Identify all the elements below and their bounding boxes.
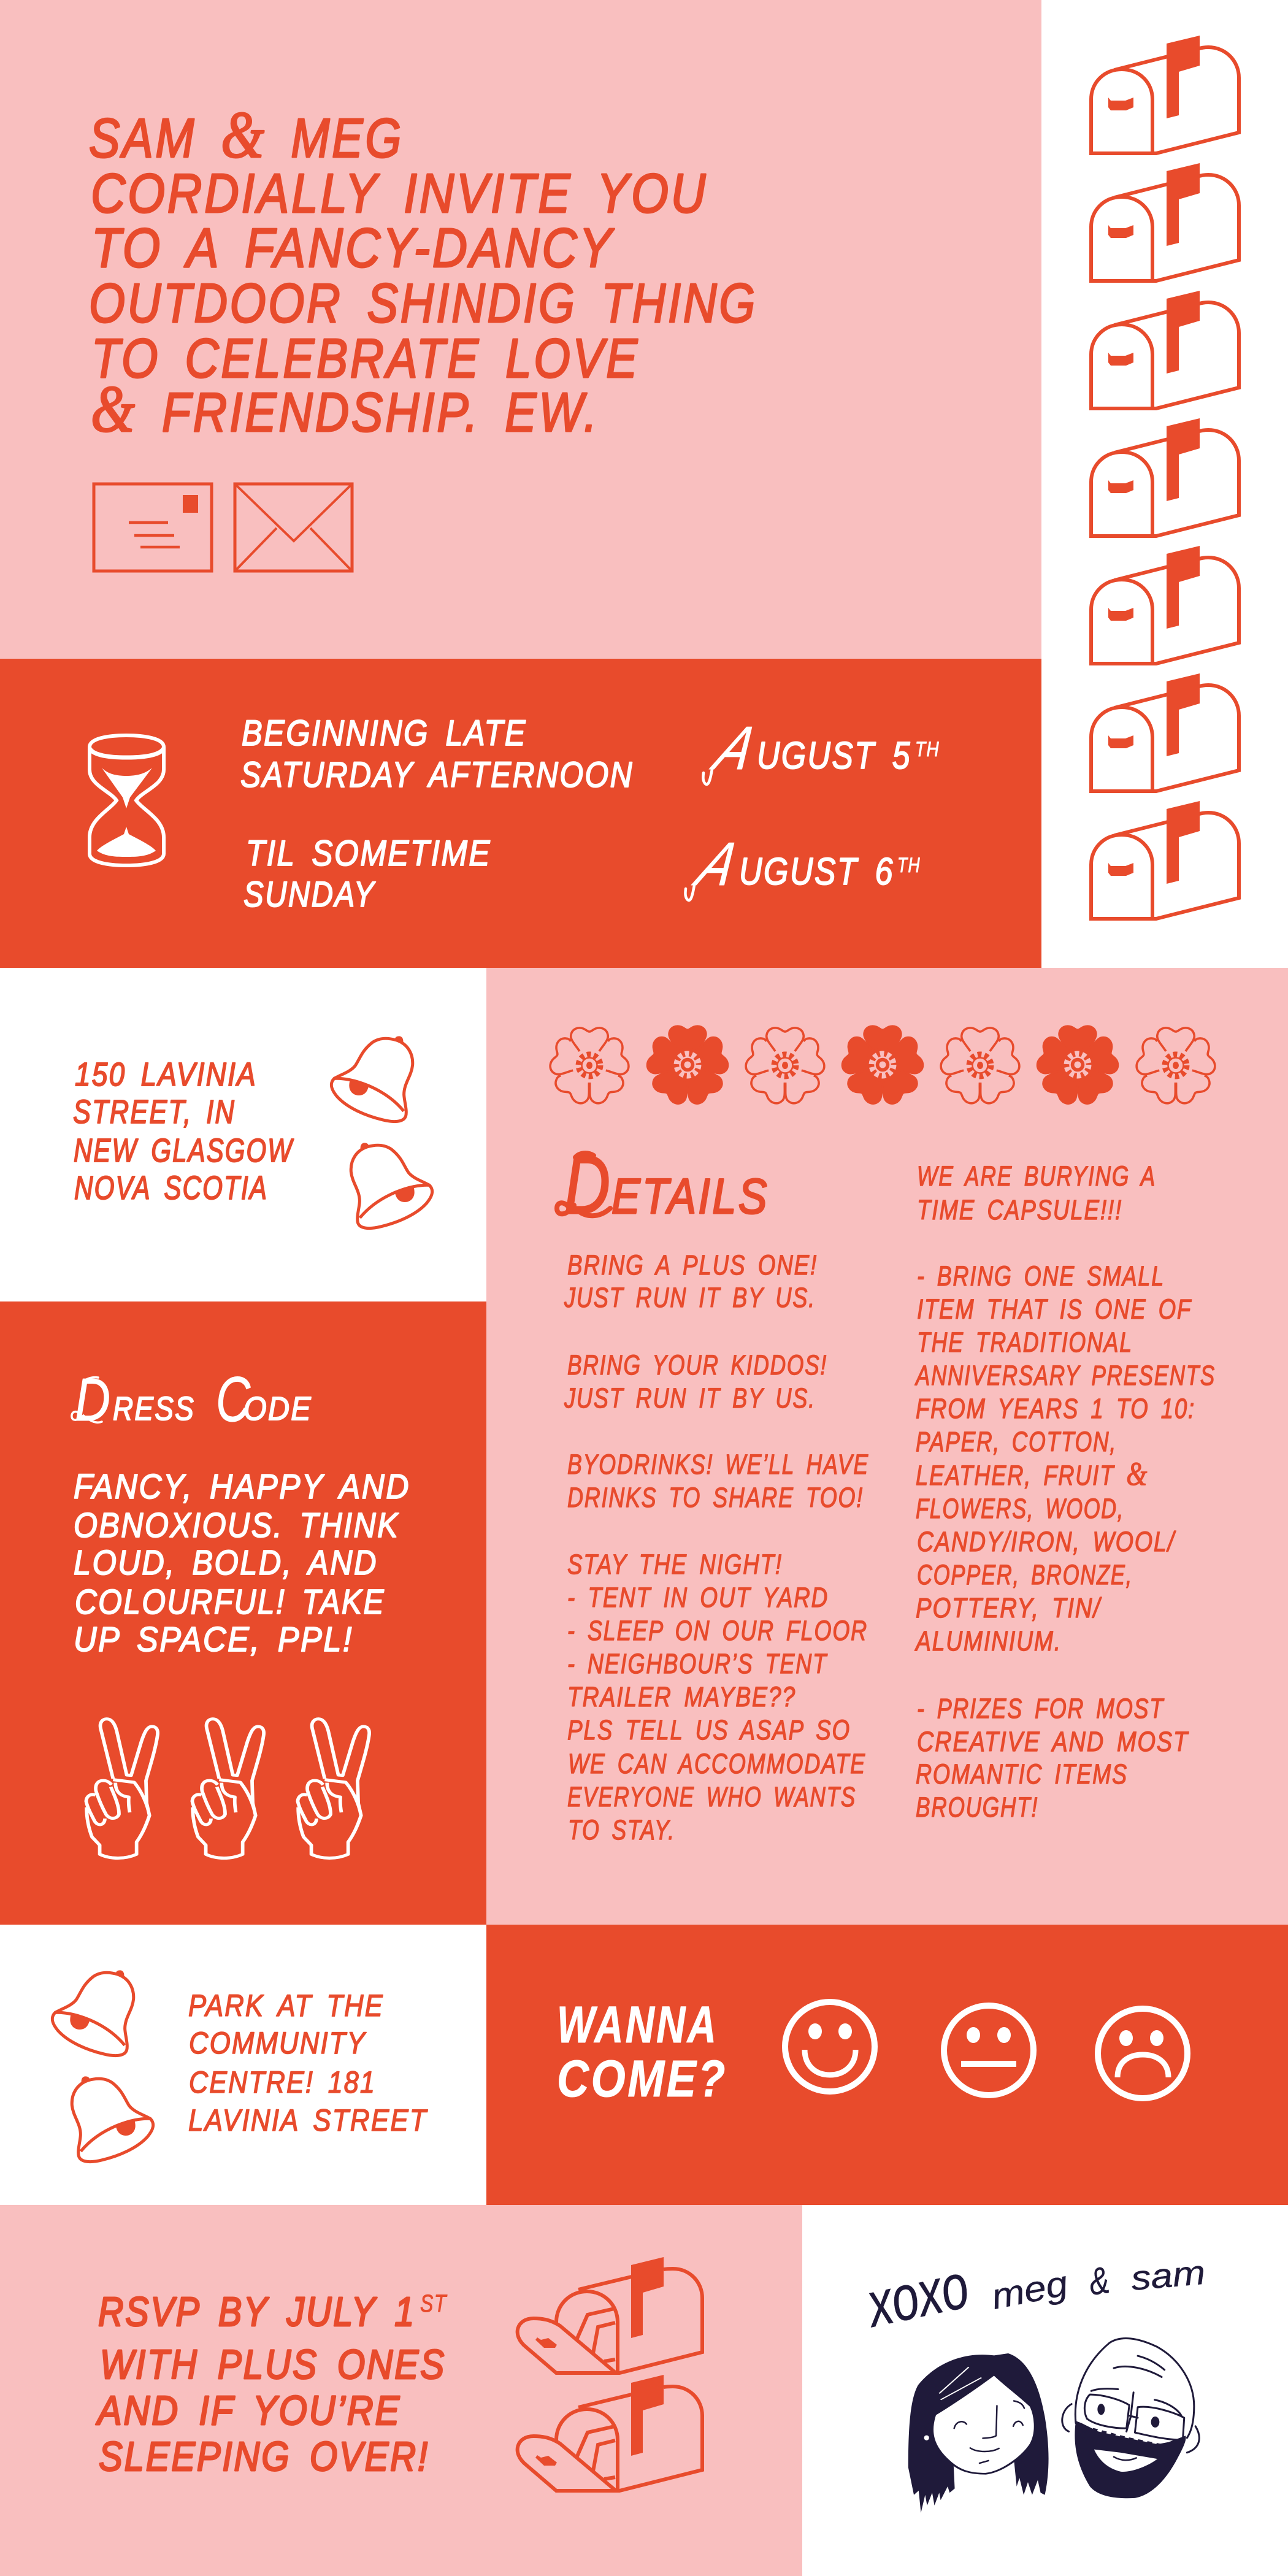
text: address: 150 LAVINIA <box>75 1056 257 1093</box>
text: details left column: - SLEEP ON OUR FLOOR <box>567 1615 868 1646</box>
title: invitation headline: TO A FANCY-DANCY <box>91 218 615 279</box>
icon: mailbox 1 <box>1089 36 1239 153</box>
text: details right column: CREATIVE AND MOST <box>917 1726 1189 1757</box>
text: details right column: ITEM THAT IS ONE OF <box>917 1294 1192 1325</box>
icon: open mailbox upper <box>518 2257 702 2373</box>
panel: intro invitation <box>0 0 1041 659</box>
text: details left column: WE CAN ACCOMMODATE <box>568 1748 866 1779</box>
text: dress code body <box>74 1467 410 1659</box>
icon: bell lower <box>351 1143 432 1229</box>
text: details right column: FROM YEARS 1 TO 10: <box>916 1393 1195 1424</box>
text: RSVP <box>95 2289 447 2480</box>
text: details left column <box>564 1249 869 1846</box>
text: details right column: THE TRADITIONAL <box>917 1327 1133 1358</box>
text: details right column: ALUMINIUM. <box>914 1625 1062 1657</box>
heading: dress code: RESS <box>113 1390 195 1427</box>
text: details left column: EVERYONE WHO WANTS <box>567 1781 856 1812</box>
text: details right column: WE ARE BURYING A <box>917 1160 1156 1192</box>
text: signature: sam <box>1130 2253 1207 2298</box>
panel: RSVP <box>0 2205 802 2576</box>
text: RSVP: AND IF YOU’RE <box>95 2388 401 2434</box>
text: details left column: BRING A PLUS ONE! <box>567 1249 818 1281</box>
text: parking <box>188 1988 428 2137</box>
panel: address <box>0 968 486 1301</box>
text: address: NEW GLASGOW <box>74 1132 294 1169</box>
text: details left column: TO STAY. <box>568 1814 675 1846</box>
heading: details: ETAILS <box>611 1169 769 1224</box>
icon: bell lower <box>72 2076 153 2162</box>
date: August 6th: UGUST 6 <box>739 851 894 893</box>
heading: wanna come <box>557 1996 727 2107</box>
text: details right column: CANDY/IRON, WOOL/ <box>917 1526 1176 1557</box>
icon: bell upper <box>52 1970 134 2056</box>
text: RSVP: SLEEPING OVER! <box>99 2434 429 2480</box>
text: details left column: JUST RUN IT BY US. <box>564 1382 816 1414</box>
heading: details: D <box>564 1138 613 1231</box>
heading: dress code <box>72 1364 312 1435</box>
text: address <box>73 1056 294 1206</box>
panel: schedule <box>0 659 1041 968</box>
heading: dress code: ODE <box>243 1390 312 1427</box>
text: details right column: FLOWERS, WOOD, <box>916 1493 1124 1524</box>
text: details right column: TIME CAPSULE!!! <box>917 1194 1122 1225</box>
title: invitation headline: OUTDOOR SHINDIG THING <box>89 273 757 334</box>
text: end time: SUNDAY <box>243 875 376 914</box>
date: August 6th <box>685 830 921 900</box>
icon: peace hand 2 <box>192 1719 264 1858</box>
title: invitation headline <box>89 99 757 446</box>
icon: mailbox 2 <box>1089 163 1239 281</box>
text: details right column: POTTERY, TIN/ <box>916 1592 1102 1623</box>
heading: dress code: D <box>75 1366 113 1433</box>
icon: bell upper <box>331 1036 413 1122</box>
text: details left column: BRING YOUR KIDDOS! <box>567 1349 827 1381</box>
panel: mailbox column <box>1041 0 1288 968</box>
text: address: STREET, IN <box>73 1094 236 1130</box>
portrait: meg <box>908 2353 1049 2513</box>
icon: mailbox 3 <box>1089 291 1239 408</box>
text: details left column: DRINKS TO SHARE TOO! <box>567 1482 864 1513</box>
panel: dress code <box>0 1301 486 1925</box>
date: August 5th: A <box>703 715 769 783</box>
text: details right column: - BRING ONE SMALL <box>917 1260 1165 1292</box>
text: parking: LAVINIA STREET <box>188 2103 428 2137</box>
text: details left column: TRAILER MAYBE?? <box>567 1681 796 1712</box>
text: start time: BEGINNING LATE <box>242 713 527 753</box>
text: end time <box>243 834 491 914</box>
text: signature <box>859 2250 1207 2341</box>
text: parking: PARK AT THE <box>188 1988 384 2023</box>
text: details left column: STAY THE NIGHT! <box>567 1549 783 1580</box>
text: details left column: PLS TELL US ASAP SO <box>567 1714 851 1746</box>
text: details right column: ROMANTIC ITEMS <box>916 1758 1128 1790</box>
text: end time: TIL SOMETIME <box>246 834 491 873</box>
text: details left column: - NEIGHBOUR’S TENT <box>567 1648 828 1679</box>
panel: details <box>486 968 1288 1925</box>
icon: peace hand 1 <box>86 1719 158 1858</box>
text: RSVP: RSVP BY JULY 1 <box>98 2289 416 2335</box>
text: details left column: JUST RUN IT BY US. <box>564 1282 816 1313</box>
icon: open mailbox lower <box>518 2375 702 2491</box>
text: address: NOVA SCOTIA <box>74 1170 268 1206</box>
text: details right column: LEATHER, FRUIT & <box>916 1455 1148 1492</box>
text: dress code body: UP SPACE, PPL! <box>74 1620 353 1659</box>
text: dress code body: LOUD, BOLD, AND <box>74 1543 378 1582</box>
icon: mailbox 6 <box>1089 673 1239 791</box>
flower row <box>548 1026 1217 1107</box>
heading: details <box>557 1138 769 1231</box>
date: August 5th <box>703 715 940 784</box>
text: signature: meg <box>988 2263 1071 2317</box>
date: August 5th: UGUST 5 <box>757 735 911 777</box>
icon: sad face <box>1098 2009 1187 2098</box>
icon: postcard <box>94 484 212 571</box>
title: invitation headline: CORDIALLY INVITE YOU <box>91 163 708 224</box>
date: August 5th: TH <box>915 738 940 761</box>
text: dress code body: FANCY, HAPPY AND <box>74 1467 410 1506</box>
icon: happy face <box>785 2002 875 2091</box>
text: details left column: - TENT IN OUT YARD <box>567 1582 829 1613</box>
text: RSVP: ST <box>420 2290 447 2317</box>
text: details left column: BYODRINKS! WE’LL HAVE <box>567 1449 869 1480</box>
heading: dress code: C <box>216 1364 253 1435</box>
text: details right column: COPPER, BRONZE, <box>917 1559 1133 1590</box>
text: start time <box>240 713 634 795</box>
icon: envelope <box>235 484 352 571</box>
panel: signature and portraits <box>802 2205 1288 2576</box>
panel: wanna come <box>486 1925 1288 2205</box>
text: parking: COMMUNITY <box>189 2026 367 2060</box>
icon: mailbox 4 <box>1089 418 1239 536</box>
text: RSVP: WITH PLUS ONES <box>100 2342 446 2388</box>
text: signature: xoxo <box>859 2250 975 2341</box>
icon: mailbox 7 <box>1089 801 1239 919</box>
panel: parking <box>0 1925 486 2205</box>
title: invitation headline: SAM & MEG <box>89 99 404 172</box>
heading: wanna come: WANNA <box>557 1996 718 2053</box>
text: details right column: BROUGHT! <box>916 1792 1038 1823</box>
date: August 6th: A <box>685 830 751 899</box>
text: details right column: - PRIZES FOR MOST <box>917 1693 1165 1724</box>
text: start time: SATURDAY AFTERNOON <box>240 755 634 795</box>
icon: neutral face <box>944 2006 1033 2095</box>
icon: hourglass <box>90 735 164 865</box>
text: dress code body: COLOURFUL! TAKE <box>75 1582 385 1622</box>
date: August 6th: TH <box>897 854 921 877</box>
icon: peace hand 3 <box>297 1719 369 1858</box>
text: signature: & <box>1086 2259 1112 2304</box>
text: dress code body: OBNOXIOUS. THINK <box>74 1506 399 1545</box>
portrait: sam <box>1062 2339 1199 2498</box>
text: details right column: PAPER, COTTON, <box>916 1426 1117 1457</box>
text: parking: CENTRE! 181 <box>189 2065 376 2099</box>
title: invitation headline: TO CELEBRATE LOVE <box>91 328 640 389</box>
title: invitation headline: & FRIENDSHIP. EW. <box>91 373 599 446</box>
text: details right column <box>914 1160 1216 1823</box>
heading: wanna come: COME? <box>557 2050 727 2107</box>
icon: mailbox 5 <box>1089 546 1239 664</box>
